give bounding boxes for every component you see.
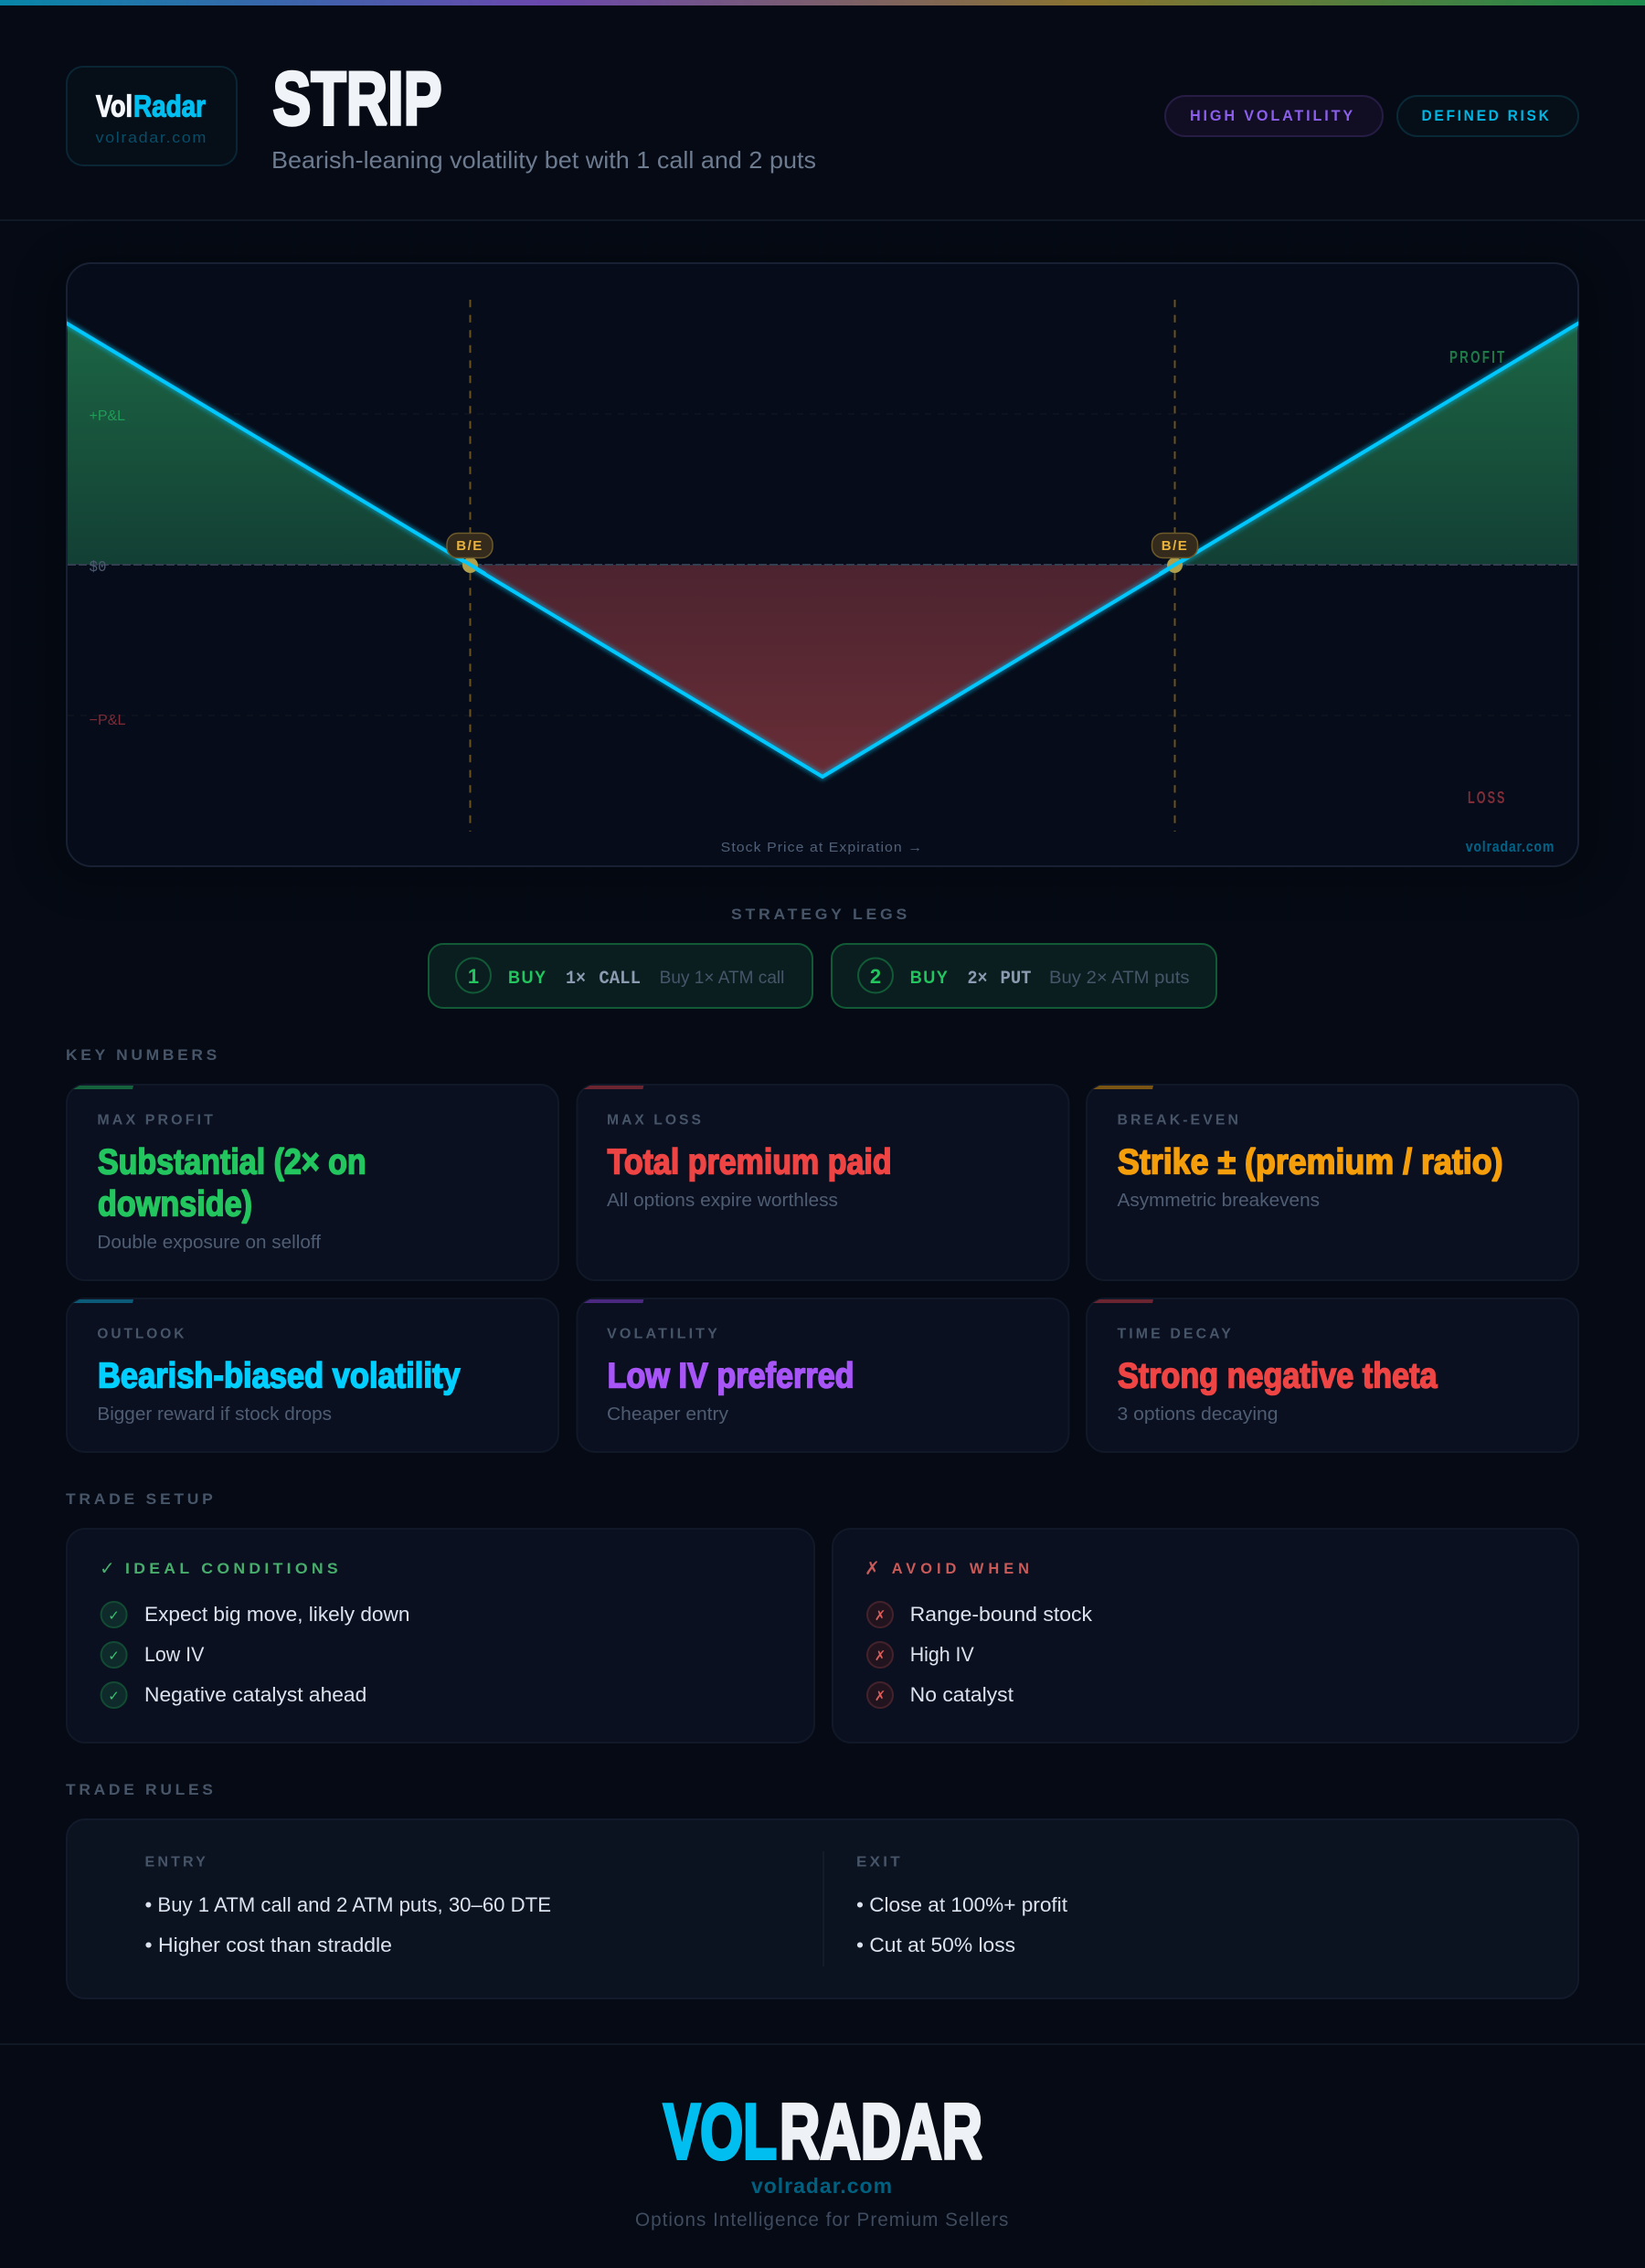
card: max profit: Substantial (2× on [98,1142,366,1182]
leg 2: BUY [910,969,949,988]
badge: defined risk: DEFINED RISK [1422,107,1552,124]
card: break-even [1087,1085,1578,1280]
heading: trade setup: TRADE SETUP [66,1491,217,1508]
axis label: $0: $0 [90,559,106,577]
right break-even marker: B/E [1162,538,1188,554]
footer [635,2089,1009,2231]
leg 2: Buy 2× ATM puts [1049,969,1190,988]
avoid item 3: ✗ [875,1688,886,1704]
panel: trade rules [67,1819,1578,1998]
avoid item 2: High IV [910,1643,974,1666]
avoid item 3 [867,1682,1014,1708]
left break-even marker: B/E [456,538,483,554]
entry rules: • Buy 1 ATM call and 2 ATM puts, 30–60 DTE [144,1893,551,1916]
panel: avoid when: AVOID WHEN [892,1561,1034,1577]
entry rules: • Higher cost than straddle [144,1934,392,1956]
heading: key numbers: KEY NUMBERS [66,1047,220,1064]
card: break-even: Asymmetric breakevens [1117,1191,1320,1211]
title: STRIP [272,56,442,141]
leg 1 [429,944,812,1008]
entry rules [144,1855,551,1956]
subtitle: Bearish-leaning volatility bet with 1 call and 2 puts [271,146,816,174]
footer tagline: Options Intelligence for Premium Sellers [635,2210,1009,2231]
avoid item 1: ✗ [875,1607,886,1624]
payoff chart panel [55,263,1590,877]
avoid item 1 [867,1602,1093,1627]
avoid item 1: Range-bound stock [910,1603,1093,1626]
panel: ideal conditions: ✓ [100,1557,115,1579]
card: max profit: Double exposure on selloff [97,1233,321,1253]
right break-even marker [1152,534,1197,574]
zone label: profit: PROFIT [1449,348,1506,366]
card: max loss [577,1085,1068,1280]
card: outlook [67,1298,558,1452]
chart watermark: volradar.com [1466,838,1555,855]
card: volatility: Low IV preferred [608,1356,854,1396]
logo badge: Vol [96,90,133,122]
card: time decay: TIME DECAY [1117,1327,1234,1341]
card: volatility: VOLATILITY [607,1327,720,1341]
ideal item 1: ✓ [108,1607,120,1624]
card: time decay [1087,1298,1578,1452]
leg 2: 2× [967,969,987,990]
axis label: -P&L: −P&L [90,713,126,728]
card: outlook: Bigger reward if stock drops [97,1404,332,1425]
logo badge [67,67,237,165]
x axis title: Stock Price at Expiration → [721,840,923,855]
leg 1: CALL [599,969,641,990]
card: max profit: MAX PROFIT [97,1113,216,1128]
footer logo: RADAR [780,2089,982,2176]
badge: high volatility: HIGH VOLATILITY [1190,107,1355,124]
panel: ideal conditions [67,1529,814,1743]
card: break-even: BREAK-EVEN [1117,1113,1241,1128]
card: max loss: Total premium paid [608,1142,892,1182]
ideal item 2: Low IV [144,1643,205,1666]
leg 1: BUY [508,969,547,988]
card: outlook: OUTLOOK [97,1327,186,1341]
entry rules: ENTRY [144,1855,208,1870]
card: max profit: downside) [98,1184,252,1224]
card: break-even: Strike ± (premium / ratio) [1118,1142,1502,1182]
leg 1: 1 [468,965,479,988]
ideal item 2: ✓ [108,1648,120,1664]
badge: high volatility [1165,96,1383,136]
exit rules: EXIT [856,1855,903,1870]
card: outlook: Bearish-biased volatility [98,1356,461,1396]
panel: ideal conditions: IDEAL CONDITIONS [125,1561,342,1577]
card: max loss: All options expire worthless [607,1191,838,1211]
ideal item 1: Expect big move, likely down [144,1603,409,1626]
card: time decay: 3 options decaying [1117,1404,1278,1425]
exit rules [856,1855,1067,1956]
left break-even marker [447,534,493,574]
logo badge: Radar [133,90,206,122]
card: volatility [577,1298,1068,1452]
card: time decay: Strong negative theta [1118,1356,1438,1396]
card: volatility: Cheaper entry [607,1404,728,1425]
leg 2: 2 [870,965,881,988]
top gradient bar [0,0,1645,5]
header [67,56,1578,174]
heading: trade rules: TRADE RULES [66,1782,217,1798]
card: max profit [67,1085,558,1280]
badge: defined risk [1397,96,1578,136]
loss area [470,565,1175,777]
ideal item 3: Negative catalyst ahead [144,1683,366,1706]
avoid item 2: ✗ [875,1648,886,1664]
card: max loss: MAX LOSS [607,1113,704,1128]
panel: avoid when [833,1529,1578,1743]
avoid item 2 [867,1642,974,1668]
footer logo: VOL [663,2089,777,2176]
ideal item 2 [101,1642,205,1668]
exit rules: • Close at 100%+ profit [856,1893,1067,1916]
leg 1: 1× [566,969,586,990]
logo badge: volradar.com [95,129,207,146]
footer logo [663,2089,982,2176]
strategy legs [429,906,1216,1008]
ideal item 3: ✓ [108,1688,120,1704]
leg 1: Buy 1× ATM call [660,969,784,988]
profit area left [68,323,470,565]
profit area right [1175,323,1577,565]
leg 2 [832,944,1216,1008]
exit rules: • Cut at 50% loss [856,1934,1015,1956]
leg 2: PUT [1000,969,1031,990]
heading: strategy legs: STRATEGY LEGS [731,906,910,923]
panel: avoid when: ✗ [865,1557,880,1579]
axis label: +P&L: +P&L [90,408,125,424]
zero line [68,564,1577,566]
footer url: volradar.com [751,2174,893,2198]
payoff line [55,316,1590,777]
avoid item 3: No catalyst [910,1683,1014,1706]
zone label: loss: LOSS [1468,789,1506,807]
break-even guide lines [470,300,1175,832]
